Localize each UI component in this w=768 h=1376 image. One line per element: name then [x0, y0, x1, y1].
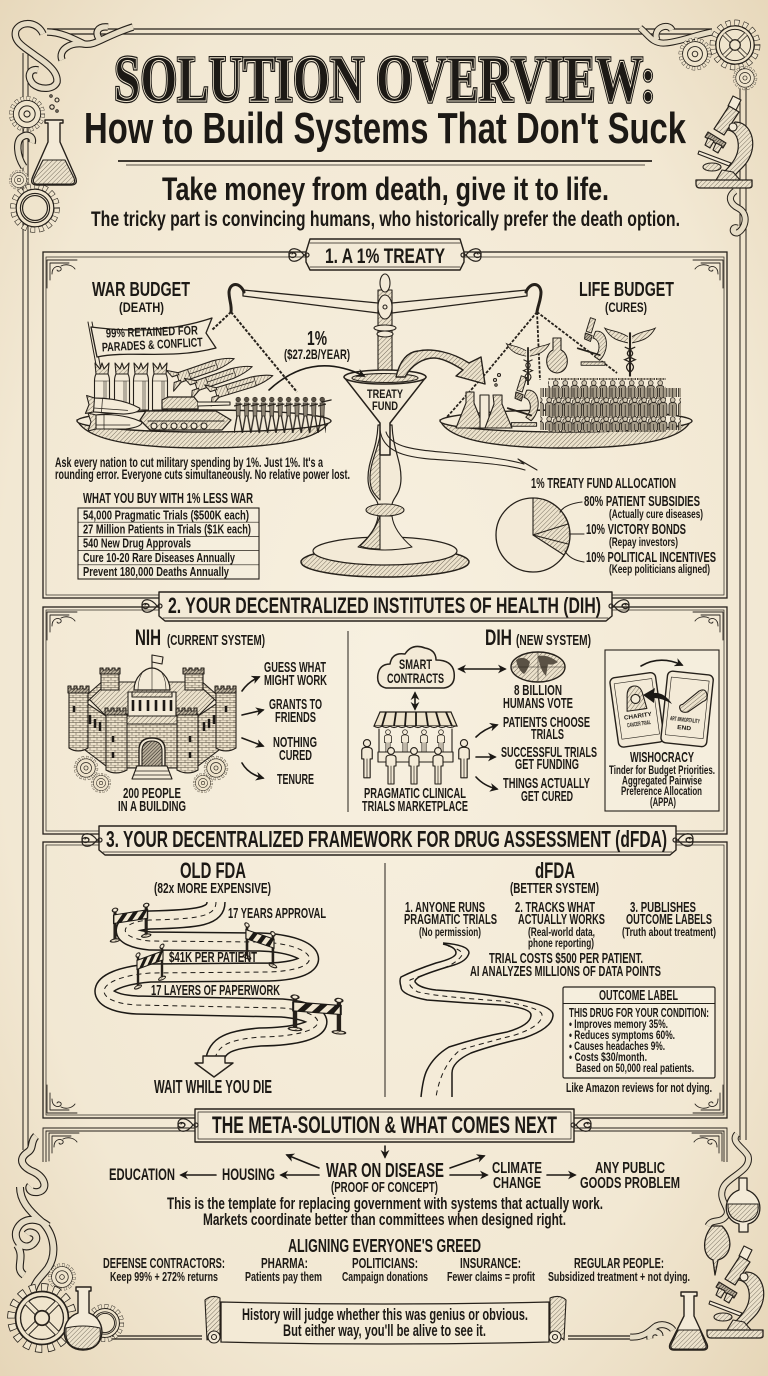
- icon: crowd of people: [540, 378, 681, 432]
- dFDA heading: (BETTER SYSTEM): [510, 881, 599, 897]
- DIH outcomes with arrows: GET FUNDING: [515, 756, 579, 773]
- panel: wishocracy: WISHOCRACY: [630, 749, 694, 766]
- icons: top right gears: [681, 23, 757, 89]
- NIH outcomes with arrows: CURED: [279, 747, 312, 764]
- step 2: 2. TRACKS WHAT: [515, 900, 595, 916]
- NIH outcomes with arrows: TENURE: [277, 771, 314, 788]
- label: 8 billion: 8 BILLION: [514, 682, 562, 699]
- dome: [128, 692, 176, 720]
- greed columns: DEFENSE CONTRACTORS:: [103, 1256, 225, 1272]
- label: 200 people: [118, 785, 186, 815]
- pie chart: allocation: [496, 498, 584, 572]
- NIH heading: (CURRENT SYSTEM): [167, 633, 265, 649]
- label: marketplace: [362, 785, 468, 815]
- icon: smart contracts cloud: SMART: [399, 656, 432, 672]
- panel: wishocracy: Aggregated Pairwise: [622, 774, 702, 788]
- greed columns: INSURANCE:: [460, 1256, 521, 1272]
- text: ask every nation: rounding error. Everyone cuts simultaneously. No relative power lost.: [55, 467, 350, 482]
- life budget heading: LIFE BUDGET: [579, 279, 674, 301]
- label: 8 billion: [503, 682, 573, 712]
- step 2: (Real-world data,: [528, 925, 595, 939]
- war budget heading: (DEATH): [119, 299, 164, 315]
- heading: 2. DIH: 2. YOUR DECENTRALIZED INSTITUTES OF HEALTH (DIH): [168, 593, 601, 618]
- front wall: [125, 716, 179, 768]
- NIH heading: NIH: [135, 625, 161, 650]
- label: 1%: ($27.2B/YEAR): [284, 346, 350, 362]
- panel: 1% treaty: [43, 239, 727, 598]
- double rule: [118, 161, 652, 165]
- outcome label box: • Improves memory 35%.: [569, 1017, 668, 1031]
- flow diagram: war on disease: EDUCATION: [109, 1166, 175, 1184]
- courtyard and rear walls: [88, 682, 216, 716]
- outcome label box: OUTCOME LABEL: [599, 988, 678, 1004]
- DIH outcomes with arrows: GET CURED: [521, 788, 573, 805]
- gears: [75, 757, 97, 779]
- panel: meta solution: [43, 1109, 727, 1284]
- icon: smart contracts cloud: [378, 646, 454, 688]
- NIH outcomes with arrows: NOTHING: [273, 734, 317, 751]
- funnel: treaty fund: TREATY: [367, 387, 403, 401]
- icons: bottom left gears and flask: [11, 1265, 122, 1350]
- tagline: Take money from death, give it to life.: [162, 171, 609, 207]
- allocation labels: 80% PATIENT SUBSIDIES: [584, 494, 700, 510]
- outcome label box: • Causes headaches 9%.: [569, 1039, 665, 1053]
- greed columns: Campaign donations: [342, 1269, 428, 1284]
- DIH heading: [485, 625, 591, 650]
- icons: right flasks: [705, 1178, 760, 1275]
- left pan: weapons: [77, 318, 331, 448]
- flow diagram: war on disease: CLIMATE: [492, 1160, 542, 1177]
- greed columns: Subsidized treatment + not dying.: [548, 1269, 690, 1284]
- text: template: This is the template for replacing government with systems that actually work.: [167, 1195, 603, 1213]
- heading: meta solution: [178, 1109, 591, 1142]
- label: marketplace: TRIALS MARKETPLACE: [362, 798, 468, 815]
- table: what you buy: WHAT YOU BUY WITH 1% LESS WAR: [83, 491, 253, 507]
- label: marketplace: PRAGMATIC CLINICAL: [364, 785, 466, 802]
- icon: phone left: [609, 672, 665, 748]
- NIH outcomes with arrows: FRIENDS: [275, 709, 316, 726]
- table: what you buy: [78, 491, 259, 579]
- old FDA heading: (82x MORE EXPENSIVE): [154, 881, 271, 897]
- panel: wishocracy: (APPA): [650, 795, 676, 809]
- banner: 99% retained: [88, 318, 216, 370]
- NIH outcomes with arrows: GRANTS TO: [269, 696, 322, 713]
- icon: rockets: [166, 348, 276, 406]
- label: 1%: [284, 328, 350, 362]
- icon: market stall: [362, 712, 469, 784]
- greed columns: Patients pay them: [245, 1269, 322, 1284]
- arrow: 1% into fund: [269, 366, 364, 390]
- step 2: [515, 900, 605, 950]
- arrow: cloud to market: [414, 693, 416, 709]
- flow diagram: war on disease: GOODS PROBLEM: [580, 1175, 680, 1192]
- panel: wishocracy: [605, 650, 719, 811]
- life budget heading: (CURES): [605, 299, 647, 315]
- DIH outcomes with arrows: SUCCESSFUL TRIALS: [501, 744, 597, 761]
- panel: wishocracy: Tinder for Budget Priorities.: [609, 763, 715, 777]
- icon: phone right: [660, 671, 714, 747]
- text: template: Markets coordinate better than committees when designed right.: [203, 1211, 566, 1229]
- step 3: 3. PUBLISHES: [630, 900, 696, 916]
- icon: phone right: END: [677, 725, 692, 732]
- barriers: [110, 903, 345, 1034]
- allocation labels: [584, 494, 716, 576]
- icon: top right microscope: [696, 96, 753, 188]
- allocation labels: (Keep politicians aligned): [609, 562, 710, 576]
- dFDA heading: dFDA: [535, 858, 575, 883]
- label: 1%: 1%: [307, 328, 327, 350]
- step 2: phone reporting): [528, 936, 594, 950]
- step 1: PRAGMATIC TRIALS: [404, 912, 497, 928]
- right pan: cures: [440, 318, 692, 448]
- icon: swipe arrow: [643, 688, 672, 704]
- step 3: [622, 900, 716, 939]
- outcome label box: • Costs $30/month.: [569, 1050, 647, 1064]
- old FDA road labels: [151, 905, 326, 1097]
- balance scale: [212, 274, 617, 577]
- table: what you buy: 54,000 Pragmatic Trials ($500K each): [83, 508, 249, 522]
- outcome label box: [563, 987, 715, 1078]
- heading: 2. DIH: [142, 592, 629, 621]
- DIH outcomes with arrows: TRIALS: [531, 726, 564, 743]
- side towers: [69, 691, 236, 751]
- old FDA road labels: WAIT WHILE YOU DIE: [154, 1077, 272, 1097]
- panel: wishocracy: Preference Allocation: [621, 784, 702, 798]
- allocation labels: (Actually cure diseases): [609, 507, 703, 521]
- NIH outcomes with arrows: [242, 659, 327, 788]
- arrow: fund to life budget: [396, 350, 485, 384]
- arrow: fund to allocation: [380, 430, 537, 470]
- label: 200 people: IN A BUILDING: [118, 798, 186, 815]
- text: trial costs: AI ANALYZES MILLIONS OF DATA POINTS: [470, 964, 661, 980]
- NIH heading: [135, 625, 265, 650]
- greed columns: POLITICIANS:: [352, 1256, 418, 1272]
- step 3: (Truth about treatment): [622, 925, 716, 939]
- scroll: closing line: But either way, you'll be alive to see it.: [283, 1322, 486, 1340]
- icon: castle: [68, 655, 236, 792]
- outcome label box: Based on 50,000 real patients.: [576, 1061, 694, 1075]
- war budget heading: WAR BUDGET: [92, 279, 190, 301]
- NIH outcomes with arrows: GUESS WHAT: [264, 659, 326, 676]
- rear towers: [101, 672, 203, 690]
- step 1: [404, 900, 497, 939]
- text: template: [167, 1195, 603, 1229]
- heading: 1. A 1% treaty: [289, 239, 481, 270]
- label: 200 people: 200 PEOPLE: [123, 785, 181, 802]
- heading: 1. A 1% treaty: 1. A 1% TREATY: [325, 245, 445, 268]
- outcome label box: • Reduces symptoms 60%.: [569, 1028, 675, 1042]
- heading: meta solution: THE META-SOLUTION & WHAT COMES NEXT: [212, 1112, 557, 1139]
- icon: smart contracts cloud: CONTRACTS: [387, 670, 444, 686]
- greed columns: Fewer claims = profit: [447, 1269, 535, 1284]
- old FDA road labels: 17 LAYERS OF PAPERWORK: [151, 982, 280, 999]
- flow diagram: war on disease: HOUSING: [222, 1166, 275, 1184]
- old FDA heading: OLD FDA: [180, 858, 246, 883]
- greed columns: [103, 1256, 690, 1284]
- icons: top left gears and flask: [10, 95, 76, 230]
- step 3: OUTCOME LABELS: [626, 912, 712, 928]
- dFDA heading: [510, 858, 599, 897]
- DIH heading: (NEW SYSTEM): [516, 633, 591, 649]
- DIH outcomes with arrows: PATIENTS CHOOSE: [503, 714, 590, 731]
- text: trial costs: TRIAL COSTS $500 PER PATIENT.: [489, 951, 643, 967]
- panel: DIH: [43, 592, 727, 834]
- banner: 99% retained: PARADES & CONFLICT: [101, 335, 203, 355]
- icons: bottom right microscope and flask: [670, 1246, 764, 1350]
- table: what you buy: 540 New Drug Approvals: [83, 536, 191, 550]
- life budget heading: [579, 279, 674, 315]
- icon: lab flasks: [456, 374, 538, 428]
- allocation heading: 1% TREATY FUND ALLOCATION: [531, 476, 676, 492]
- DIH heading: DIH: [485, 625, 512, 650]
- scroll: closing line: History will judge whether this was genius or obvious.: [242, 1306, 528, 1324]
- text: ask every nation: [55, 455, 350, 482]
- arrow: cloud to globe: [459, 668, 505, 670]
- winding road: old FDA: [104, 902, 318, 1077]
- flow diagram: war on disease: (PROOF OF CONCEPT): [331, 1179, 438, 1196]
- old FDA road labels: 17 YEARS APPROVAL: [228, 905, 326, 922]
- allocation labels: (Repay investors): [609, 535, 678, 549]
- table: what you buy: Cure 10-20 Rare Diseases Annually: [83, 550, 236, 565]
- heading: aligning greed: ALIGNING EVERYONE'S GREED: [288, 1235, 481, 1256]
- funnel: treaty fund: FUND: [372, 399, 398, 413]
- step 2: ACTUALLY WORKS: [518, 912, 605, 928]
- icon: phone left: CHARITY: [624, 712, 652, 722]
- old FDA heading: [154, 858, 271, 897]
- step 1: 1. ANYONE RUNS: [405, 900, 485, 916]
- greed columns: PHARMA:: [261, 1256, 308, 1272]
- flow diagram: war on disease: [109, 1146, 680, 1196]
- panel: dFDA: [43, 826, 727, 1118]
- flow diagram: war on disease: CHANGE: [493, 1175, 541, 1192]
- allocation labels: 10% VICTORY BONDS: [586, 522, 686, 538]
- table: what you buy: Prevent 180,000 Deaths Annually: [83, 564, 230, 579]
- text: trial costs: [470, 951, 661, 980]
- icon: soldiers: [234, 396, 331, 433]
- label: 8 billion: HUMANS VOTE: [503, 695, 573, 712]
- NIH outcomes with arrows: MIGHT WORK: [264, 672, 327, 689]
- old FDA road labels: $41K PER PATIENT: [169, 949, 257, 966]
- icon: phone right: ART IMMORTALITY: [670, 716, 700, 725]
- icon: medical symbols: [506, 318, 655, 385]
- icon: globe: [511, 652, 565, 682]
- icon: tank: [140, 397, 231, 430]
- gate and steps: [139, 738, 165, 766]
- flow diagram: war on disease: ANY PUBLIC: [595, 1160, 665, 1177]
- DIH outcomes with arrows: [476, 714, 597, 805]
- flow diagram: war on disease: WAR ON DISEASE: [326, 1160, 444, 1182]
- step 1: (No permission): [419, 925, 481, 939]
- winding road: dFDA: [400, 943, 553, 1097]
- DIH outcomes with arrows: THINGS ACTUALLY: [503, 775, 590, 792]
- table: what you buy: 27 Million Patients in Trials ($1K each): [83, 522, 251, 536]
- text: ask every nation: Ask every nation to cut military spending by 1%. Just 1%. It's a: [55, 455, 323, 470]
- greed columns: REGULAR PEOPLE:: [574, 1256, 664, 1272]
- icon: bombs: [85, 363, 168, 431]
- banner: 99% retained: 99% RETAINED FOR: [106, 323, 198, 341]
- funnel: treaty fund: [344, 370, 426, 455]
- icon: phone left: CANCER TRIAL: [627, 720, 652, 729]
- scroll: closing line: [205, 1296, 566, 1344]
- greed columns: Keep 99% + 272% returns: [110, 1269, 218, 1284]
- war budget heading: [92, 279, 190, 315]
